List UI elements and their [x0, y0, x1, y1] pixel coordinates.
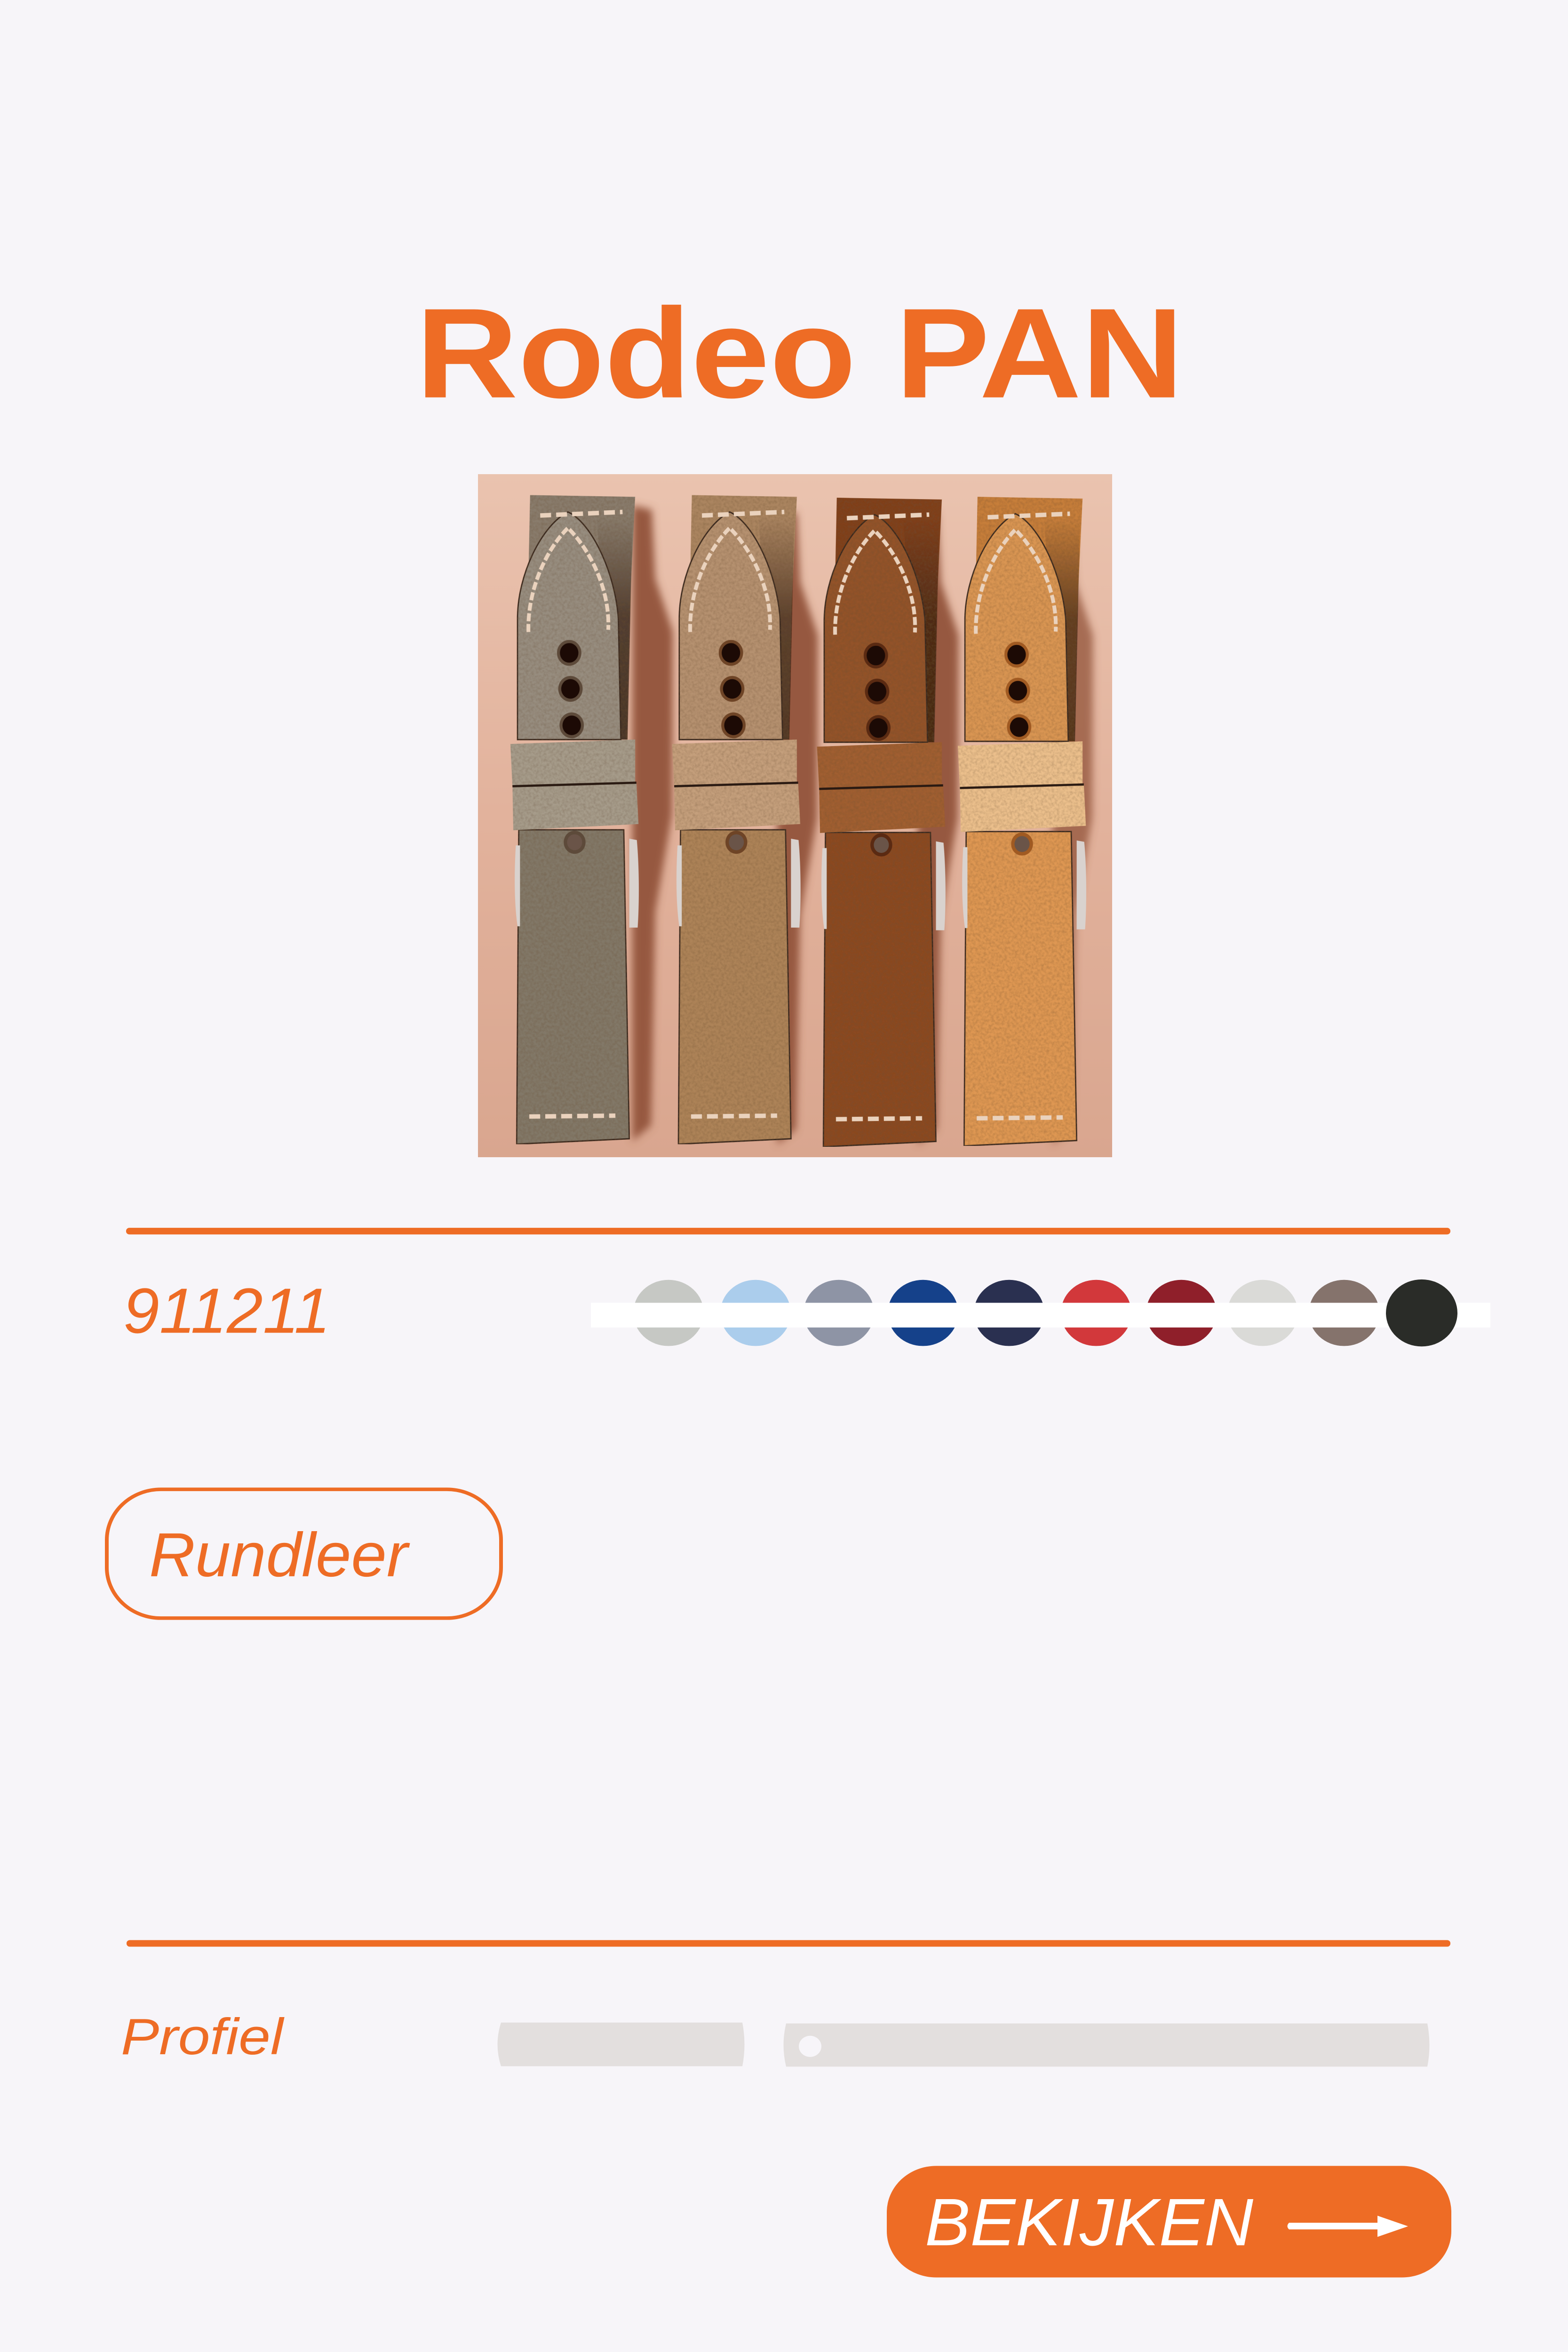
strap: cognac — [817, 498, 946, 1147]
icon: arrow — [1287, 2216, 1408, 2237]
strap: grey — [510, 495, 639, 1144]
strap: taupe — [672, 495, 801, 1144]
colour swatches — [591, 1279, 1490, 1346]
button: bekijken — [887, 2166, 1451, 2278]
product photo: four leather watch straps — [478, 474, 1112, 1157]
bottom divider — [127, 1940, 1450, 1947]
profile label: Profiel — [121, 2008, 285, 2065]
strap: natural — [958, 497, 1086, 1146]
title: Rodeo PAN — [416, 282, 1184, 425]
material tag: Rundleer — [149, 1520, 410, 1589]
profile bar: short piece — [498, 2023, 744, 2066]
article number: 911211 — [123, 1275, 330, 1346]
profile bar: long piece — [784, 2024, 1429, 2066]
material tag — [107, 1489, 501, 1618]
button: bekijken: BEKIJKEN — [925, 2185, 1254, 2260]
top divider — [126, 1228, 1450, 1234]
strap shadows — [632, 505, 1093, 1144]
